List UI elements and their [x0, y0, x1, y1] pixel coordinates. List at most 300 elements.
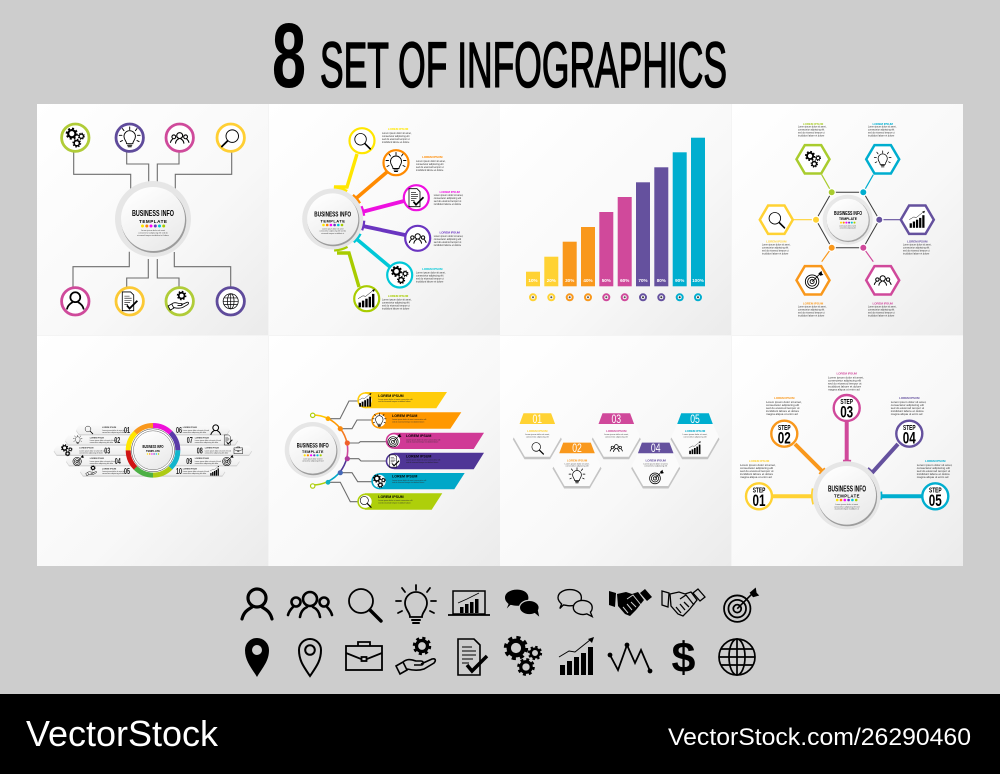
label: magenta: [868, 302, 897, 318]
title: 8: [272, 5, 306, 107]
footer band: VectorStock.com/26290460: [668, 724, 971, 751]
label: purple: LOREM IPSUM: [907, 240, 928, 244]
step 04: STEP: [903, 425, 916, 432]
label: step 05: LOREM IPSUM: [925, 459, 946, 463]
row numbers: 07: [187, 435, 193, 445]
center disc: [132, 429, 174, 472]
row text: Lorem ipsum dolor sit amet elit sed: [183, 429, 209, 432]
center disc: TEMPLATE: [146, 449, 160, 453]
label: cyan: incididunt labore et dolore: [868, 134, 895, 138]
panel: bar chart: [500, 104, 731, 335]
label: magenta: Lorem ipsum dolor sit amet,: [434, 194, 464, 197]
label: purple: sed do eiusmod tempor ut: [434, 241, 462, 244]
row numbers: 01: [124, 425, 130, 435]
label: orange: [416, 155, 446, 172]
row text: LOREM IPSUM: [90, 458, 104, 460]
hex step 04: consectetur adipiscing elit: [644, 465, 668, 468]
row numbers: 03: [104, 445, 110, 455]
hex step 01: [513, 412, 562, 459]
bar 50%: [599, 212, 613, 301]
label: step 04: LOREM IPSUM: [899, 396, 920, 400]
center disc: BUSINESS INFO: [314, 210, 351, 218]
row numbers: 08: [197, 445, 203, 455]
label: step 05: sed do eiusmod tempor ut: [917, 469, 950, 473]
bar 60%: 60%: [620, 278, 629, 283]
bar 100%: [691, 138, 705, 301]
label: lime: Lorem ipsum dolor sit amet,: [798, 126, 827, 128]
center disc: consectetur adipiscing elit: [840, 226, 856, 229]
row numbers: 06: [176, 425, 182, 435]
panel: ten-step ring: [37, 336, 268, 566]
hex step 05: LOREM IPSUM: [685, 429, 706, 433]
footer band: [0, 694, 1000, 774]
label: cyan: LOREM IPSUM: [422, 267, 443, 271]
center disc: BUSINESS INFO: [297, 442, 329, 450]
arm: step 05: [881, 494, 922, 498]
hex step 05: 05: [690, 412, 700, 426]
row text: Lorem ipsum dolor sit amet elit sed: [205, 449, 231, 452]
label: lime: Lorem ipsum dolor sit amet,: [382, 298, 412, 302]
banner: purple: Lorem ipsum dolor sit amet consectetur elit: [406, 459, 441, 462]
banner: magenta: Lorem ipsum dolor sit amet consectetur elit: [406, 438, 441, 441]
label: magenta: sed do eiusmod tempor ut: [434, 200, 462, 203]
node: bulb: [384, 150, 408, 175]
label: lime: LOREM IPSUM: [388, 294, 409, 298]
label: purple: LOREM IPSUM: [440, 230, 460, 234]
row text: consectetur adipiscing elit dolor: [79, 451, 103, 454]
panel: hexagon diagram: [732, 104, 963, 335]
bar 70%: [636, 182, 650, 301]
bar 50%: 50%: [602, 278, 611, 283]
step 04: 04: [903, 428, 916, 448]
icon: filled handshake: [609, 589, 652, 616]
row numbers: 09: [186, 456, 192, 466]
hex step 01: 01: [532, 412, 542, 426]
panel: radial icons: [37, 104, 268, 335]
icon: filled chat: [505, 590, 539, 617]
top circle: bulb: [116, 124, 143, 151]
label: step 02: sed do eiusmod tempor ut: [766, 406, 800, 410]
label: orange: incididunt labore et dolore: [798, 314, 825, 318]
bottom circle: globe: [217, 288, 244, 315]
row text: [79, 427, 231, 475]
label: step 02: incididunt labore et dolore: [766, 409, 799, 413]
label: step 04: sed do eiusmod tempor ut: [891, 406, 924, 410]
center disc: TEMPLATE: [839, 217, 857, 221]
hex step 04: [631, 441, 680, 488]
label: lime: LOREM IPSUM: [803, 122, 824, 126]
row text: LOREM IPSUM: [79, 448, 94, 450]
label: yellow: consectetur adipiscing elit: [382, 135, 410, 138]
label: step 03: sed do eiusmod tempor ut: [828, 382, 862, 386]
row text: consectetur adipiscing elit dolor: [195, 462, 219, 465]
icon: briefcase: [346, 642, 382, 670]
row text: consectetur adipiscing elit dolor: [183, 472, 207, 475]
center disc: Lorem ipsum dolor sit amet: [303, 458, 323, 460]
icon: gears: [506, 638, 541, 675]
panel: petal diagram: [269, 104, 500, 335]
bar 60%: [618, 197, 632, 301]
hex: target: [796, 266, 830, 294]
label: step 01: LOREM IPSUM: [749, 459, 770, 463]
label: step 02: LOREM IPSUM: [774, 396, 795, 400]
row text: LOREM IPSUM: [102, 427, 116, 429]
row text: LOREM IPSUM: [183, 468, 197, 470]
center disc: [813, 461, 881, 529]
label: step 03: consectetur adipiscing elit: [828, 378, 861, 382]
hex step 04: 04: [651, 441, 661, 455]
center disc: consectetur adipiscing elit sed do: [138, 231, 169, 234]
hex step 02: LOREM IPSUM: [567, 458, 588, 462]
step 01: [746, 483, 772, 510]
banner: magenta: sed do eiusmod tempor incididunt labore: [406, 441, 438, 444]
arm: purple: [358, 225, 405, 235]
icon: growth chart: [559, 637, 594, 675]
icon: target: [724, 588, 759, 622]
row text: Lorem ipsum dolor sit amet elit sed: [183, 470, 209, 473]
arm: step 04: [871, 444, 898, 474]
label: yellow: [762, 240, 791, 256]
colored arc: [264, 401, 362, 499]
node: team: [405, 226, 430, 251]
label: yellow: incididunt labore et dolore: [382, 141, 410, 144]
step 03: [834, 395, 860, 422]
label: cyan: LOREM IPSUM: [873, 122, 893, 126]
center disc: consectetur adipiscing elit sed do: [319, 230, 346, 233]
row numbers: 10: [176, 466, 182, 476]
bottom circle: document: [116, 288, 143, 315]
step 02: 02: [778, 428, 791, 448]
icon: zigzag line: [608, 644, 652, 672]
banner: lime: LOREM IPSUM: [378, 495, 404, 499]
icon: dollar: $: [672, 634, 696, 682]
label: cyan: sed do eiusmod tempor ut: [868, 132, 895, 134]
hex: gears: [796, 145, 830, 174]
bar 90%: 90%: [675, 278, 684, 283]
icon: globe: [719, 639, 755, 675]
label: orange: sed do eiusmod tempor ut: [416, 166, 444, 169]
step 05: 05: [929, 491, 942, 510]
label: lime: incididunt labore et dolore: [382, 308, 410, 310]
row text: Lorem ipsum dolor sit amet elit sed: [90, 439, 116, 442]
label: step 03: magna aliqua ut enim ad: [828, 388, 860, 392]
label: step 04: consectetur adipiscing elit: [891, 403, 924, 407]
step 04: [896, 421, 922, 448]
bottom circle: user: [62, 288, 89, 315]
label: lime: sed do eiusmod tempor ut: [382, 304, 410, 308]
banner: purple: sed do eiusmod tempor incididunt labore: [406, 461, 438, 464]
label: step 02: [766, 396, 802, 416]
bar 90%: [673, 152, 687, 301]
arm: cyan: [353, 236, 390, 267]
arm: step 02: [795, 444, 825, 474]
row text: LOREM IPSUM: [90, 437, 104, 439]
label: magenta: LOREM IPSUM: [440, 190, 460, 194]
banner: yellow: LOREM IPSUM: [378, 394, 404, 398]
step 02: STEP: [778, 425, 791, 432]
label: yellow: LOREM IPSUM: [388, 127, 409, 131]
hex step 02: 02: [572, 441, 582, 455]
center disc: TEMPLATE: [320, 218, 345, 224]
label: yellow: sed do eiusmod tempor ut: [762, 250, 789, 252]
arm: lime: [337, 253, 359, 287]
center disc: TEMPLATE: [834, 494, 860, 498]
step 05: [922, 483, 948, 510]
banner: cyan: Lorem ipsum dolor sit amet consectetur elit: [392, 479, 427, 482]
center disc: Lorem ipsum dolor sit amet: [322, 228, 344, 230]
label: step 02: consectetur adipiscing elit: [766, 403, 799, 407]
label: yellow: [382, 127, 412, 144]
label: orange: Lorem ipsum dolor sit amet,: [798, 306, 827, 308]
color ring: [118, 415, 188, 485]
row text: LOREM IPSUM: [195, 458, 209, 460]
hex step 02: Lorem ipsum dolor sit amet,: [565, 462, 590, 465]
label: purple: [903, 240, 932, 256]
top circle: gears: [62, 124, 89, 151]
label: orange: incididunt labore et dolore: [416, 169, 444, 172]
label: step 04: incididunt labore et dolore: [891, 409, 924, 413]
label: purple: [434, 230, 464, 247]
label: cyan: incididunt labore et dolore: [416, 280, 444, 284]
arm: magenta: [358, 201, 404, 213]
center disc: Lorem ipsum dolor sit amet: [141, 229, 166, 232]
label: cyan: sed do eiusmod tempor ut: [416, 278, 444, 280]
label: cyan: Lorem ipsum dolor sit amet,: [868, 126, 897, 128]
center disc: consectetur adipiscing elit sed: [302, 460, 323, 462]
row numbers: [104, 425, 203, 476]
label: magenta: incididunt labore et dolore: [434, 203, 462, 206]
row text: Lorem ipsum dolor sit amet elit sed: [90, 460, 116, 463]
panel: banner list: [264, 336, 500, 566]
label: yellow: incididunt labore et dolore: [762, 252, 789, 256]
row text: consectetur adipiscing elit dolor: [102, 472, 126, 475]
label: orange: LOREM IPSUM: [422, 155, 443, 159]
hex step 03: LOREM IPSUM: [606, 429, 627, 433]
banner: cyan: [372, 473, 465, 489]
row text: consectetur adipiscing elit dolor: [90, 441, 114, 444]
center disc: consectetur adipiscing elit sed: [834, 505, 859, 508]
arm: yellow: [334, 154, 357, 187]
step 02: [771, 421, 797, 448]
row text: Lorem ipsum dolor sit amet elit sed: [195, 439, 221, 442]
bar 40%: 40%: [583, 278, 593, 283]
label: step 04: Lorem ipsum dolor sit amet,: [891, 400, 927, 404]
arm: step 01: [771, 494, 814, 498]
label: purple: consectetur adipiscing elit: [903, 246, 930, 250]
step 01: 01: [752, 491, 766, 510]
label: orange: LOREM IPSUM: [803, 302, 824, 306]
label: purple: incididunt labore et dolore: [903, 252, 930, 256]
bar 40%: [581, 227, 595, 301]
icon: outline handshake: [662, 589, 705, 616]
icon: outline pin: [299, 639, 321, 676]
label: orange: [798, 302, 827, 318]
frame nodes: [812, 189, 883, 251]
label: step 03: LOREM IPSUM: [837, 372, 857, 376]
icon: user: [242, 589, 272, 619]
hex step 03: [592, 412, 641, 459]
banner: magenta: LOREM IPSUM: [406, 434, 431, 438]
hex step 04: Lorem ipsum dolor sit amet,: [643, 462, 668, 465]
row text: Lorem ipsum dolor sit amet elit sed: [79, 449, 106, 452]
label: magenta: consectetur adipiscing elit: [434, 197, 461, 200]
central hexagon frame: [816, 192, 879, 248]
label: step 03: incididunt labore et dolore: [828, 384, 861, 388]
label: step 02: magna aliqua ut enim ad: [766, 412, 798, 416]
arm: step 03: [845, 422, 849, 463]
label: lime: consectetur adipiscing elit: [382, 302, 410, 304]
label: step 05: incididunt labore et dolore: [917, 472, 950, 476]
row icons: [61, 425, 243, 476]
label: magenta: consectetur adipiscing elit: [868, 308, 895, 312]
bar 30%: 30%: [565, 278, 574, 283]
banner: yellow: [358, 392, 447, 408]
hex step 01: LOREM IPSUM: [527, 429, 548, 433]
bar 10%: [526, 272, 540, 301]
hex step 04: LOREM IPSUM: [646, 458, 666, 462]
icon set: [242, 585, 759, 682]
label: lime: incididunt labore et dolore: [798, 134, 825, 138]
center disc: eiusmod tempor incididunt ut: [835, 508, 859, 511]
center disc: TEMPLATE: [302, 450, 324, 454]
node: chart: [354, 286, 379, 311]
label: lime: sed do eiusmod tempor ut: [798, 132, 825, 134]
row numbers: 05: [124, 466, 130, 476]
bar 10%: 10%: [528, 278, 538, 283]
icon: team: [288, 592, 332, 617]
panel backing sheet: [37, 104, 963, 566]
label: orange: consectetur adipiscing elit: [416, 163, 444, 166]
hex step 02: [552, 441, 602, 488]
step 05: STEP: [929, 488, 942, 494]
center disc: [823, 195, 873, 245]
label: step 05: consectetur adipiscing elit: [917, 466, 950, 470]
label: step 01: sed do eiusmod tempor ut: [740, 469, 774, 473]
banner: orange: Lorem ipsum dolor sit amet consectetur elit: [392, 418, 427, 421]
banner: lime: sed do eiusmod tempor incididunt labore: [378, 501, 411, 504]
label: step 04: [891, 396, 927, 416]
title: [272, 5, 727, 107]
connector lines: [73, 152, 232, 287]
label: yellow: sed do eiusmod tempor ut: [382, 138, 410, 141]
label: step 01: magna aliqua ut enim ad: [740, 475, 772, 479]
row text: consectetur adipiscing elit dolor: [205, 451, 229, 454]
step 01: STEP: [753, 488, 766, 494]
hex step 01: Lorem ipsum dolor sit amet,: [525, 433, 550, 436]
banner: cyan: sed do eiusmod tempor incididunt labore: [392, 481, 424, 484]
step 03: STEP: [840, 399, 853, 406]
hex step 03: 03: [611, 412, 621, 426]
banner: orange: sed do eiusmod tempor incididunt labore: [392, 420, 424, 423]
top circle: search: [217, 124, 244, 151]
hex step 05: Lorem ipsum dolor sit amet,: [683, 433, 708, 436]
panel: five steps: [732, 336, 963, 566]
banner: yellow: Lorem ipsum dolor sit amet consectetur elit: [378, 398, 413, 401]
label: cyan: [416, 267, 446, 284]
banner: yellow: sed do eiusmod tempor incididunt labore: [378, 400, 411, 403]
row text: Lorem ipsum dolor sit amet elit sed: [195, 460, 221, 463]
label: cyan: [868, 122, 897, 138]
banner: lime: Lorem ipsum dolor sit amet consectetur elit: [378, 499, 413, 502]
icon: laptop chart: [448, 591, 490, 615]
center disc: eiusmod tempor incididunt ut: [321, 232, 345, 235]
label: step 01: [740, 459, 776, 479]
center disc: eiusmod tempor incididunt ut labore: [137, 234, 170, 237]
bottom circle: hand gear: [166, 288, 193, 315]
bar 80%: 80%: [657, 278, 666, 283]
label: orange: sed do eiusmod tempor ut: [798, 312, 825, 314]
label: step 05: [917, 459, 953, 479]
banner: lime: [358, 493, 442, 510]
center disc: Lorem ipsum dolor sit amet: [835, 503, 859, 506]
label: step 03: Lorem ipsum dolor sit amet,: [828, 376, 864, 380]
label: orange: Lorem ipsum dolor sit amet,: [416, 160, 446, 163]
connector lines: [328, 401, 386, 502]
row text: consectetur adipiscing elit dolor: [183, 431, 207, 434]
row numbers: 02: [114, 435, 120, 445]
step 03: 03: [840, 403, 853, 422]
label: magenta: Lorem ipsum dolor sit amet,: [868, 306, 897, 308]
bar 80%: [654, 167, 668, 301]
row text: Lorem ipsum dolor sit amet elit sed: [102, 470, 128, 473]
label: yellow: LOREM IPSUM: [766, 240, 787, 244]
center disc: BUSINESS INFO: [132, 208, 174, 218]
banner: cyan: LOREM IPSUM: [392, 475, 417, 479]
label: magenta: [434, 190, 464, 206]
bar 20%: 20%: [547, 278, 556, 283]
center disc: [285, 422, 341, 478]
label: cyan: consectetur adipiscing elit: [868, 128, 895, 132]
row text: LOREM IPSUM: [102, 468, 116, 470]
row bars: [54, 426, 252, 477]
bar 20%: [544, 257, 558, 301]
hex: chart: [901, 206, 934, 234]
row text: LOREM IPSUM: [205, 448, 219, 450]
label: magenta: LOREM IPSUM: [873, 302, 893, 306]
arm: orange: [353, 172, 387, 201]
top circle: team: [166, 124, 193, 151]
label: magenta: sed do eiusmod tempor ut: [868, 312, 895, 314]
row text: consectetur adipiscing elit dolor: [102, 431, 126, 434]
icon: outline chat: [558, 590, 592, 617]
panel: hexagon steps: [500, 336, 731, 566]
banner: orange: LOREM IPSUM: [392, 414, 417, 418]
icon: hand with gear: [396, 638, 435, 674]
center disc: [302, 188, 363, 250]
node: document: [404, 185, 429, 210]
label: magenta: incididunt labore et dolore: [868, 314, 895, 318]
label: cyan: consectetur adipiscing elit: [416, 274, 444, 278]
row text: LOREM IPSUM: [195, 437, 209, 439]
icon: filled pin: [245, 638, 269, 677]
banner: purple: LOREM IPSUM: [406, 454, 431, 458]
label: yellow: consectetur adipiscing elit: [762, 246, 789, 250]
label: step 01: Lorem ipsum dolor sit amet,: [740, 463, 776, 467]
center disc: Lorem ipsum dolor sit amet: [839, 224, 857, 228]
bar 70%: 70%: [638, 278, 648, 283]
icon: light bulb: [396, 585, 436, 623]
arm caps along the disc: [798, 447, 895, 544]
hex step 05: consectetur adipiscing elit: [684, 435, 707, 438]
node: gears: [387, 262, 412, 288]
hex: team: [866, 266, 899, 294]
label: lime: consectetur adipiscing elit: [798, 128, 825, 132]
icon: document check: [458, 639, 487, 675]
center disc: BUSINESS INFO: [142, 444, 164, 449]
row text: consectetur adipiscing elit dolor: [195, 441, 219, 444]
banner: magenta: [386, 433, 484, 449]
hex step 03: consectetur adipiscing elit: [605, 435, 628, 438]
